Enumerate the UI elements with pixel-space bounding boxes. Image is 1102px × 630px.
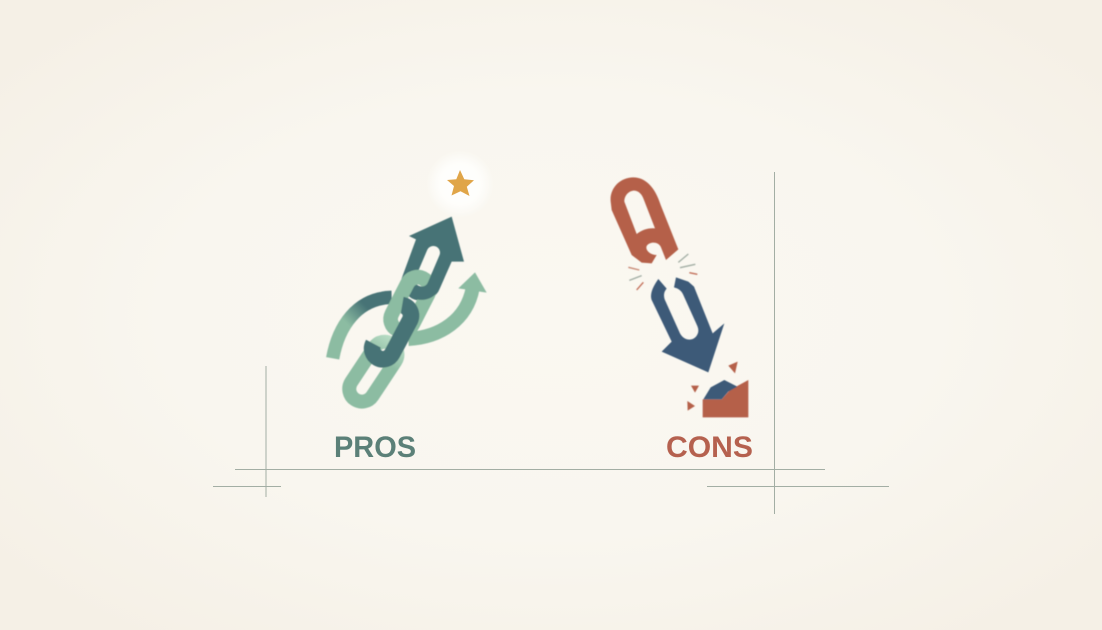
lower dark link, visible band bbox=[368, 301, 415, 363]
debris fragments bbox=[687, 362, 738, 411]
label: cons: CONS bbox=[666, 431, 753, 464]
label: pros: PROS bbox=[334, 431, 416, 464]
middle light link bbox=[387, 273, 433, 335]
broken red link bbox=[611, 177, 678, 263]
arrow link front segment bbox=[413, 275, 438, 293]
navy falling arrow bbox=[651, 277, 724, 372]
lower light link bbox=[344, 337, 402, 406]
pros illustration: rising chain and arrows bbox=[333, 217, 487, 406]
curved arc left bbox=[333, 297, 392, 358]
spark lines bbox=[628, 254, 697, 290]
icon: gold star bbox=[447, 170, 474, 196]
cons illustration: broken chain and falling arrow bbox=[611, 177, 748, 417]
crumbled block bbox=[703, 380, 748, 417]
dark arrow with link bbox=[402, 217, 464, 301]
star glow bbox=[426, 150, 494, 218]
curved green arrow bbox=[408, 272, 487, 339]
